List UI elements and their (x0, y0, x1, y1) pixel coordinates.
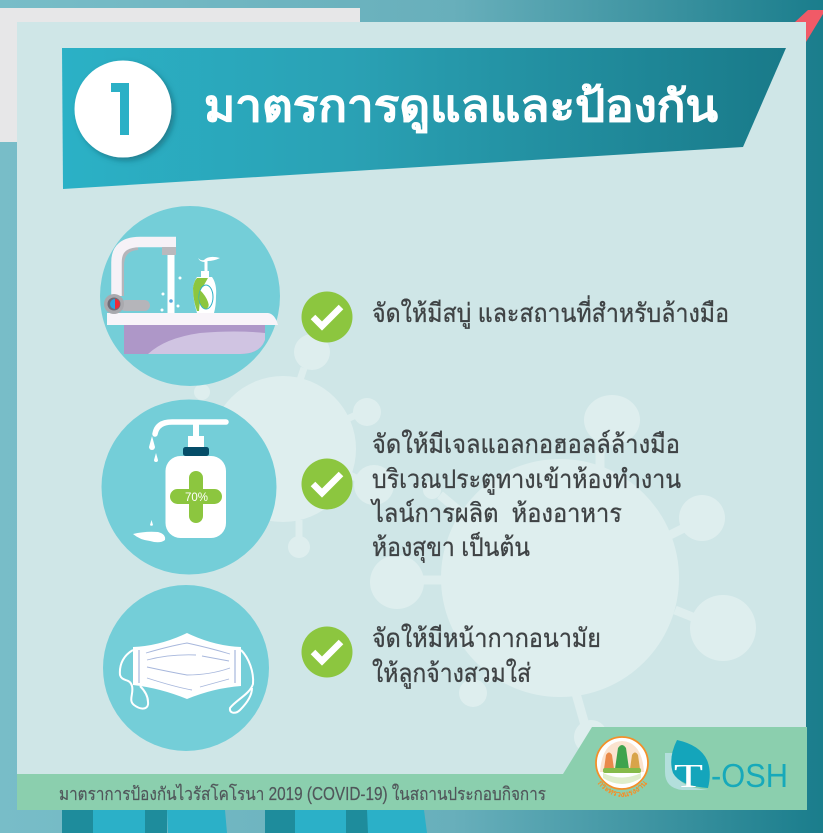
text 2: ไลน์การผลิต ห้องอาหาร (370, 498, 622, 528)
check 3 (302, 626, 352, 678)
title banner (62, 48, 786, 189)
text 2: จัดให้มีเจลแอลกอฮอลล์ล้างมือ (372, 429, 680, 459)
label: 70%: 70% (185, 492, 208, 504)
footer bar (17, 727, 807, 810)
text 3 (372, 623, 601, 689)
icon: face mask (103, 585, 269, 751)
text 3: ให้ลูกจ้างสวมใส่ (372, 658, 531, 689)
check 1 (302, 292, 352, 342)
footer text: มาตราการป้องกันไวรัสโคโรนา 2019 (COVID-19) ในสถานประกอบกิจการ (59, 783, 546, 804)
text 3: จัดให้มีหน้ากากอนามัย (372, 623, 601, 653)
text 2: บริเวณประตูทางเข้าห้องทำงาน (372, 464, 681, 495)
virus background (194, 334, 756, 754)
logo: T-OSH: T (674, 758, 703, 795)
logo: ministry seal: กระทรวงแรงงาน (598, 781, 648, 798)
logo: T-OSH: -OSH (711, 757, 788, 794)
text 2: ห้องสุขา เป็นต้น (372, 531, 530, 563)
icon: alcohol gel bottle (102, 400, 276, 574)
check 2 (302, 458, 352, 510)
logo: T-OSH (665, 740, 788, 795)
number badge (74, 60, 172, 158)
icon: sink and soap (100, 206, 280, 386)
bottom stripes (62, 810, 427, 833)
text 2 (370, 429, 681, 563)
text 1: จัดให้มีสบู่ และสถานที่สำหรับล้างมือ (372, 295, 729, 329)
heading: มาตรการดูแลและป้องกัน (204, 82, 718, 133)
logo: ministry seal (595, 736, 649, 798)
